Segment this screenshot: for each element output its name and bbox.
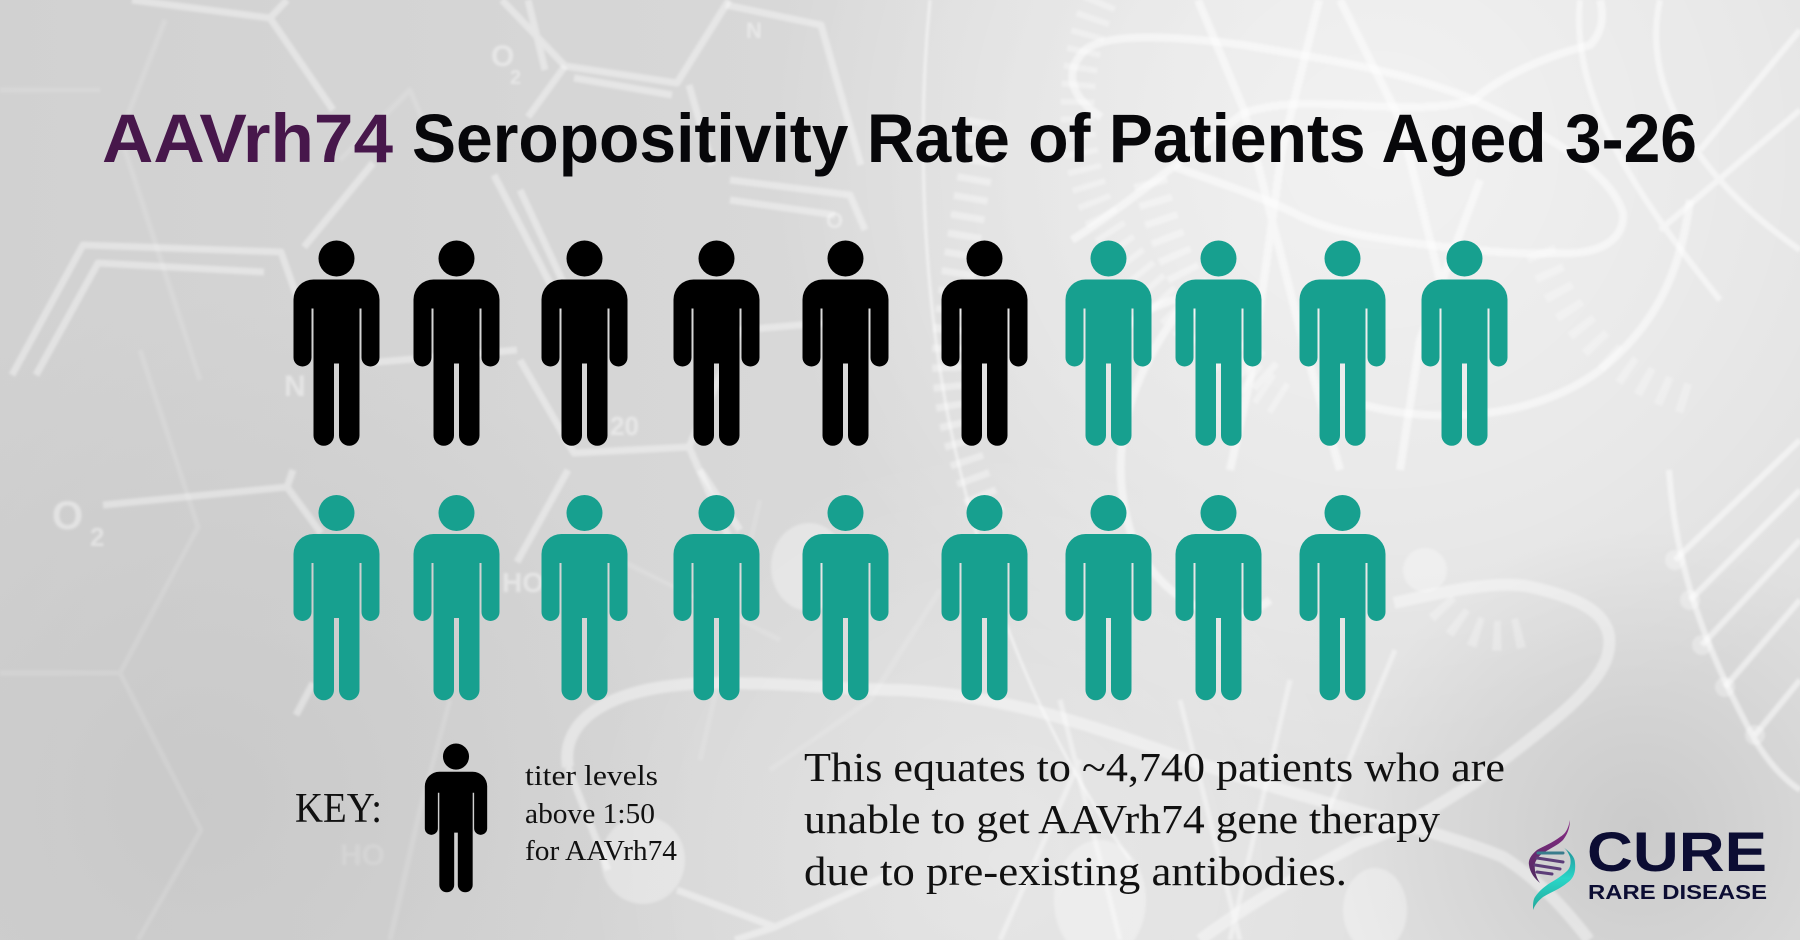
key description	[525, 761, 677, 867]
key description: for AAVrh74	[525, 836, 677, 867]
person 8 teal	[1176, 240, 1262, 446]
background: grey molecular pattern: N	[284, 370, 306, 403]
person 4 black	[674, 240, 760, 446]
person 18 teal	[1176, 495, 1262, 700]
person 16 teal	[942, 495, 1028, 700]
background: grey molecular pattern: HO	[502, 567, 544, 598]
person 17 teal	[1066, 495, 1152, 700]
title	[102, 100, 1697, 177]
person 6 black	[942, 240, 1028, 446]
key description: above 1:50	[525, 799, 655, 830]
title highlight: AAVrh74: AAVrh74	[102, 100, 393, 177]
background: grey molecular pattern: 2	[510, 67, 521, 89]
key	[295, 744, 677, 892]
person 12 teal	[414, 495, 500, 700]
callout text: This equates to ~4,740 patients who are	[804, 744, 1505, 790]
person 1 black	[294, 240, 380, 446]
background: grey molecular pattern: 2	[90, 522, 104, 552]
icon: key person	[425, 744, 487, 892]
logo wordmark RARE DISEASE: RARE DISEASE	[1588, 882, 1767, 904]
person 19 teal	[1300, 495, 1386, 700]
background: grey molecular pattern: O	[491, 40, 514, 73]
key description: titer levels	[525, 761, 658, 792]
person 10 teal	[1422, 240, 1508, 446]
logo wordmark CURE: CURE	[1587, 820, 1767, 883]
background: grey molecular pattern: O	[52, 494, 83, 538]
background: grey molecular pattern: HO	[340, 839, 385, 872]
title text: Seropositivity Rate of Patients Aged 3-26	[412, 100, 1697, 177]
person 3 black	[542, 240, 628, 446]
background: grey molecular pattern: O	[826, 208, 843, 233]
background: grey molecular pattern: 20	[610, 411, 639, 441]
key label: KEY:	[295, 786, 382, 832]
person 11 teal	[294, 495, 380, 700]
pictogram: row 1, six black and four teal people	[294, 240, 1508, 446]
person 7 teal	[1066, 240, 1152, 446]
callout text: due to pre-existing antibodies.	[804, 848, 1347, 894]
person 5 black	[802, 240, 888, 446]
logo: Cure Rare Disease	[1529, 820, 1767, 910]
pictogram: row 2, nine teal people	[294, 495, 1386, 700]
background: grey molecular pattern: N	[746, 18, 762, 43]
person 15 teal	[802, 495, 888, 700]
person 9 teal	[1300, 240, 1386, 446]
person 13 teal	[542, 495, 628, 700]
icon: DNA helix	[1529, 820, 1575, 910]
callout text	[804, 744, 1505, 894]
person 2 black	[414, 240, 500, 446]
callout text: unable to get AAVrh74 gene therapy	[804, 796, 1441, 842]
person 14 teal	[674, 495, 760, 700]
